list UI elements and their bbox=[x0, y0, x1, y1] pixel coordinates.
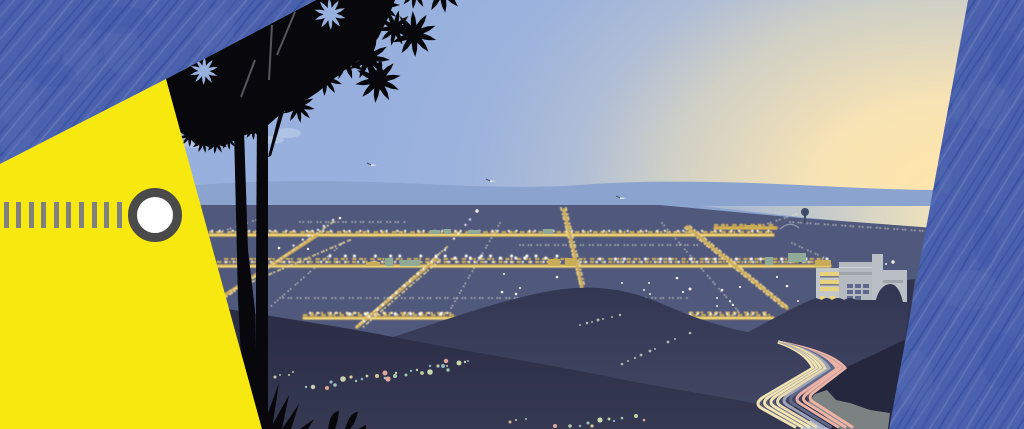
city lights grid bbox=[210, 208, 925, 328]
hill lights: middle hill bbox=[579, 314, 691, 365]
branch bbox=[268, 106, 285, 157]
city plain bbox=[180, 205, 935, 345]
sea sparkle bbox=[815, 210, 890, 214]
water tower bbox=[801, 208, 809, 223]
front-left hill bbox=[228, 309, 800, 429]
trunks bbox=[234, 130, 258, 429]
right hill bbox=[748, 284, 909, 380]
grey highlights on branches bbox=[241, 12, 295, 97]
scattered white lights bbox=[278, 209, 895, 307]
right blue brushed panel bbox=[889, 0, 1024, 429]
headlight indicator bbox=[4, 192, 178, 238]
building on the hill bbox=[816, 254, 907, 302]
grey cliff bbox=[808, 390, 890, 429]
winding road with light trails bbox=[758, 342, 853, 428]
canopy bbox=[166, 0, 395, 146]
windows bbox=[847, 284, 869, 300]
right dark slope bbox=[790, 336, 913, 429]
diagonal boulevards bbox=[222, 210, 787, 327]
lamp bbox=[132, 192, 178, 238]
middle hill bbox=[393, 288, 860, 429]
thin dotted streets bbox=[220, 213, 925, 313]
birds bbox=[367, 163, 627, 199]
main boulevards glow bbox=[210, 228, 830, 318]
far mountains bbox=[180, 181, 940, 240]
yellow floors bbox=[820, 272, 839, 291]
hill lights: front hill bbox=[274, 359, 645, 428]
yellow headlight beam bbox=[0, 79, 262, 429]
sky gaps in canopy bbox=[186, 0, 349, 88]
distant bridge bbox=[780, 224, 799, 229]
cloud bbox=[183, 128, 301, 148]
grey dashes bbox=[4, 202, 122, 228]
left blue brushed panel bbox=[0, 0, 316, 164]
dark ridge behind the building bbox=[895, 279, 915, 345]
boulevard sparkle bbox=[210, 225, 830, 315]
leaf clusters bbox=[360, 0, 400, 24]
tree silhouette bbox=[166, 0, 468, 429]
low-rise city blocks bbox=[385, 229, 806, 266]
ground fronds bbox=[262, 383, 314, 429]
sea at the horizon bbox=[700, 206, 940, 230]
